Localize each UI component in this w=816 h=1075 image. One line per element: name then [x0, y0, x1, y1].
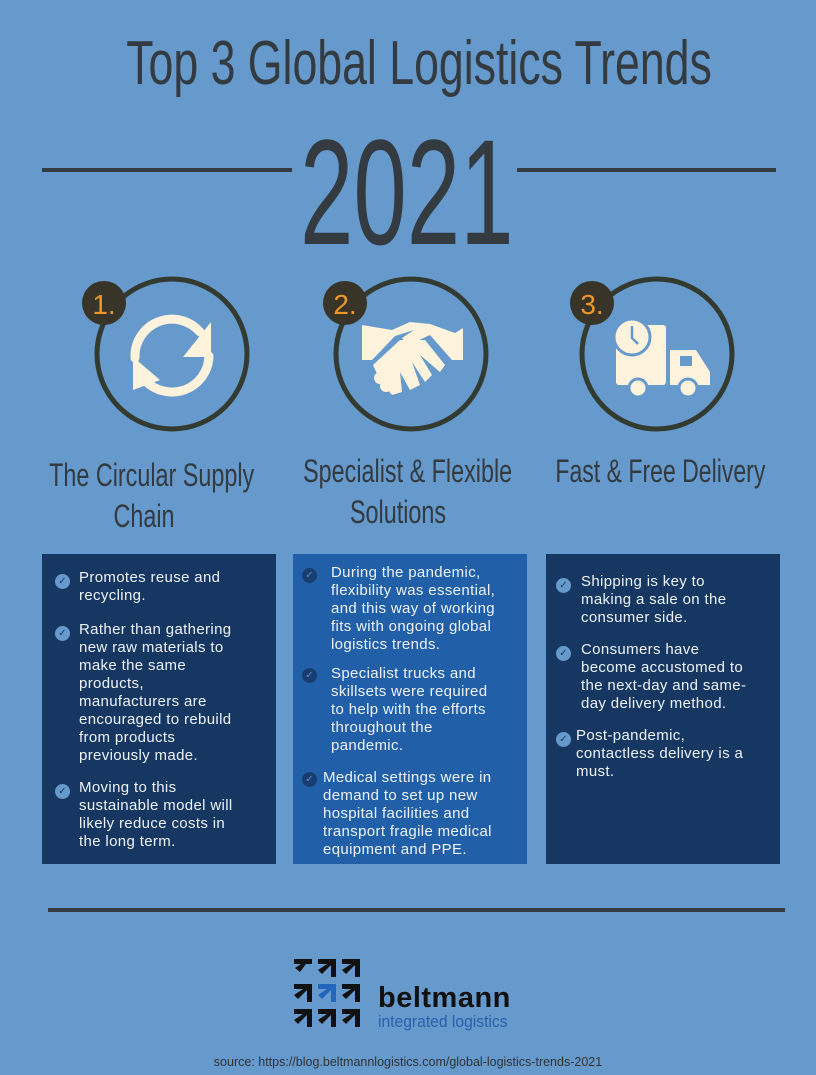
- icon: circular arrows: 1.: [92, 289, 116, 320]
- panel: circular supply chain: likely reduce costs in: [79, 815, 225, 832]
- panel: fast & free delivery: ✓: [559, 648, 568, 659]
- panel: specialist & flexible: [293, 554, 527, 864]
- panel: fast & free delivery: day delivery method.: [581, 695, 726, 712]
- panel: circular supply chain: encouraged to rebuild: [79, 711, 231, 728]
- heading: specialist & flexible: Solutions: [350, 494, 446, 530]
- panel: specialist & flexible: pandemic.: [331, 737, 403, 754]
- panel: fast & free delivery: become accustomed to: [581, 659, 743, 676]
- panel: circular supply chain: recycling.: [79, 587, 146, 604]
- panel: circular supply chain: ✓: [58, 628, 67, 639]
- year 2021: 2021: [300, 108, 514, 276]
- panel: specialist & flexible: flexibility was essential,: [331, 582, 495, 599]
- panel: circular supply chain: previously made.: [79, 747, 198, 764]
- heading: specialist & flexible: Specialist & Flexible: [303, 453, 512, 489]
- panel: circular supply chain: ✓: [58, 786, 67, 797]
- heading: specialist & flexible: [303, 453, 512, 530]
- panel: circular supply chain: make the same: [79, 657, 186, 674]
- panel: circular supply chain: [42, 554, 276, 864]
- panel: fast & free delivery: Post-pandemic,: [576, 727, 685, 744]
- panel: specialist & flexible: ✓: [305, 570, 314, 581]
- panel: fast & free delivery: making a sale on the: [581, 591, 726, 608]
- heading: fast & free delivery: Fast & Free Delivery: [555, 453, 765, 489]
- panel: fast & free delivery: Consumers have: [581, 641, 699, 658]
- panel: circular supply chain: ✓: [58, 576, 67, 587]
- panel: specialist & flexible: logistics trends.: [331, 636, 440, 653]
- panel: fast & free delivery: Shipping is key to: [581, 573, 705, 590]
- panel: fast & free delivery: ✓: [559, 734, 568, 745]
- panel: specialist & flexible: demand to set up new: [323, 787, 478, 804]
- panel: specialist & flexible: skillsets were required: [331, 683, 487, 700]
- title: Top 3 Global Logistics Trends: [126, 29, 712, 98]
- panel: fast & free delivery: [546, 554, 780, 864]
- panel: fast & free delivery: must.: [576, 763, 614, 780]
- logo: beltmann: integrated logistics: [378, 1012, 508, 1031]
- panel: specialist & flexible: to help with the efforts: [331, 701, 486, 718]
- heading: circular supply chain: The Circular Supply: [49, 457, 254, 493]
- icon: circular arrows: [82, 276, 250, 432]
- panel: circular supply chain: the long term.: [79, 833, 176, 850]
- icon: delivery truck: 3.: [580, 289, 604, 320]
- panel: circular supply chain: new raw materials to: [79, 639, 224, 656]
- panel: fast & free delivery: contactless delivery is a: [576, 745, 743, 762]
- panel: circular supply chain: Rather than gathering: [79, 621, 231, 638]
- panel: specialist & flexible: equipment and PPE.: [323, 841, 467, 858]
- source text: source: https://blog.beltmannlogistics.com/global-logistics-trends-2021: [214, 1055, 602, 1069]
- panel: fast & free delivery: consumer side.: [581, 609, 688, 626]
- panel: fast & free delivery: ✓: [559, 580, 568, 591]
- panel: specialist & flexible: hospital facilities and: [323, 805, 469, 822]
- icon: delivery truck: [570, 276, 734, 432]
- logo: beltmann: [294, 959, 511, 1031]
- panel: circular supply chain: from products: [79, 729, 175, 746]
- panel: specialist & flexible: Medical settings were in: [323, 769, 491, 786]
- icon: handshake: 2.: [333, 289, 357, 320]
- panel: specialist & flexible: fits with ongoing global: [331, 618, 491, 635]
- heading: circular supply chain: Chain: [113, 498, 175, 534]
- panel: circular supply chain: Moving to this: [79, 779, 176, 796]
- panel: specialist & flexible: transport fragile medical: [323, 823, 492, 840]
- panel: specialist & flexible: Specialist trucks and: [331, 665, 476, 682]
- panel: specialist & flexible: ✓: [305, 670, 314, 681]
- panel: fast & free delivery: the next-day and same-: [581, 677, 746, 694]
- heading: circular supply chain: [49, 457, 254, 534]
- panel: specialist & flexible: and this way of working: [331, 600, 495, 617]
- panel: specialist & flexible: throughout the: [331, 719, 433, 736]
- panel: specialist & flexible: During the pandemic,: [331, 564, 481, 581]
- panel: specialist & flexible: ✓: [305, 774, 314, 785]
- panel: circular supply chain: manufacturers are: [79, 693, 207, 710]
- logo: beltmann: beltmann: [378, 982, 511, 1014]
- icon: handshake: [323, 276, 488, 432]
- panel: circular supply chain: Promotes reuse and: [79, 569, 220, 586]
- panel: circular supply chain: sustainable model will: [79, 797, 233, 814]
- panel: circular supply chain: products,: [79, 675, 144, 692]
